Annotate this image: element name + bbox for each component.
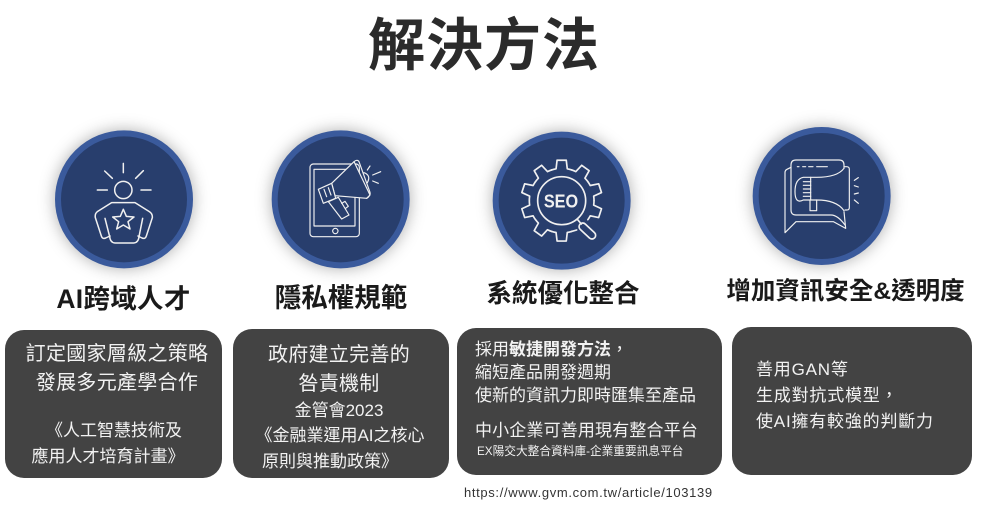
heading: security and transparency: 增加資訊安全&透明度 <box>726 278 965 305</box>
panel: security text card <box>732 327 972 475</box>
heading: AI talent: AI跨域人才 <box>56 284 191 314</box>
card text: policy line two: 原則與推動政策》 <box>262 452 398 471</box>
heading: system integration: 系統優化整合 <box>486 280 640 308</box>
panel: AI talent text card <box>5 330 222 478</box>
panel: system integration text card <box>457 328 722 475</box>
card text: example: EX陽交大整合資料庫-企業重要訊息平台 <box>477 445 683 458</box>
card text: industry academia: 發展多元產學合作 <box>36 372 198 394</box>
card text: information: 使新的資訊力即時匯集至產品 <box>475 386 696 405</box>
icon label: SEO: SEO <box>544 191 578 211</box>
icon: SEO gear with magnifier <box>484 122 640 279</box>
card text: better judgement: 使AI擁有較強的判斷力 <box>756 412 934 431</box>
title: 解決方法 <box>368 14 600 78</box>
card text: shorten cycle: 縮短產品開發週期 <box>475 363 611 382</box>
card text: use GAN: 善用GAN等 <box>756 360 849 379</box>
heading: privacy regulation: 隱私權規範 <box>275 283 407 313</box>
icon: tablet with megaphone <box>262 121 419 278</box>
card text: government: 政府建立完善的 <box>268 344 410 366</box>
icon: AI talent person with star <box>46 121 202 278</box>
card text: policy line one: 《金融業運用AI之核心 <box>255 426 425 445</box>
card text: plan name line two: 應用人才培育計畫》 <box>32 447 184 466</box>
card text: plan name line one: 《人工智慧技術及 <box>46 421 182 440</box>
card text: agile: 採用敏捷開發方法， <box>475 340 628 359</box>
icon: speech bubble with megaphone <box>744 118 900 274</box>
card text: national strategy: 訂定國家層級之策略 <box>26 343 208 365</box>
source URL: https://www.gvm.com.tw/article/103139 <box>464 485 713 500</box>
panel: privacy text card <box>233 329 449 478</box>
card text: SMEs: 中小企業可善用現有整合平台 <box>475 421 698 440</box>
card text: generative model: 生成對抗式模型， <box>756 386 898 405</box>
card text: FSC 2023: 金管會2023 <box>295 401 383 420</box>
card text: accountability: 咎責機制 <box>298 373 380 395</box>
